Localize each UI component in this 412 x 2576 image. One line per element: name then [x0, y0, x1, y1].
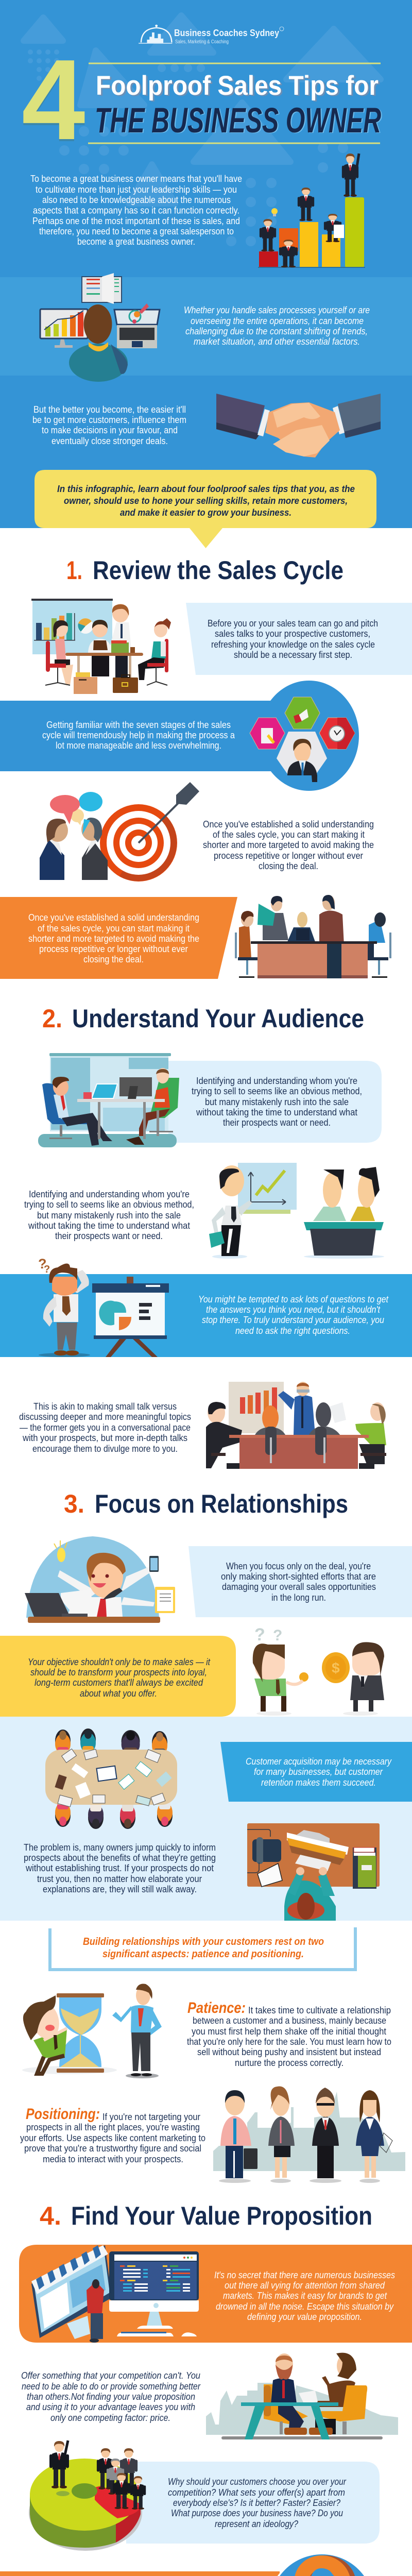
- illustration: office window with two people at desk: [38, 1053, 179, 1147]
- title: 4 Foolproof Sales Tips for the Business Owner: [22, 36, 381, 164]
- man with glasses: [312, 2088, 339, 2178]
- seated woman right: [368, 912, 391, 978]
- text: the better you become: eventually close stronger deals.: [52, 436, 168, 446]
- text: small talk: encourage them to divulge more to you.: [32, 1444, 178, 1454]
- panel: orange understanding: [0, 897, 237, 979]
- illustration: puzzled man with presentation board: [38, 1256, 169, 1357]
- seated woman left: [45, 620, 73, 685]
- intro text block: To become a great business owner means that you'll have: [30, 174, 242, 184]
- text: small talk: [19, 1401, 191, 1454]
- woman in grey jacket: [268, 2086, 295, 2178]
- man standing with folder: [258, 896, 288, 940]
- text: the better you become: But the better you become, the easier it'll: [33, 404, 186, 415]
- panel: seven stages band: lot more manageable and less overwhelming.: [56, 740, 221, 751]
- illustration: two men with coins: [253, 1625, 384, 1716]
- illustration: two men and target with arrow: [40, 782, 199, 882]
- text: tempted to ask: stop there. To truly understand your audience, you: [202, 1315, 384, 1325]
- illustration: person at monitor and laptop: [40, 273, 160, 382]
- panel: blue tempted band: [0, 1274, 412, 1357]
- heading: 4. Find Your Value Proposition: Find Your Value Proposition: [71, 2201, 372, 2230]
- heading: 1. Review the Sales Cycle: Review the Sales Cycle: [93, 556, 344, 585]
- panel: seven stages band: Getting familiar with the seven stages of the sales: [46, 720, 231, 730]
- attendee with orange hair: [252, 1405, 288, 1448]
- man in suit with big coin: [322, 1642, 384, 1711]
- heading: 3. Focus on Relationships: Focus on Relationships: [95, 1489, 348, 1518]
- panel: why should customers choose you: everybody else's? Is it better? Faster? Easier?: [173, 2498, 340, 2508]
- panel: seven stages band: [0, 681, 359, 791]
- text: identifying prospects: trying to sell to seems like an obvious method,: [24, 1199, 194, 1210]
- illustration: handshake: [216, 394, 381, 457]
- text: whether you handle sales: market situation, and other essential factors.: [194, 336, 360, 347]
- panel: orange numerous businesses: drowned in all the noise. Escape this situation by: [216, 2301, 394, 2312]
- panel: orange understanding: closing the deal.: [83, 954, 144, 964]
- left man: [40, 819, 68, 880]
- panel: orange numerous businesses: markets. This makes it easy for brands to get: [223, 2291, 387, 2301]
- panel: light blue retention section: [0, 1717, 412, 1921]
- text: the problem is: explanations are, they will still walk away.: [43, 1884, 197, 1894]
- text: the problem is: The problem is, many owners jump quickly to inform: [24, 1842, 216, 1853]
- standing man: [109, 604, 132, 678]
- text: patience: It takes time to cultivate a relationship: [248, 2005, 391, 2015]
- seated man with laptop: [287, 912, 315, 942]
- man in blue chair: [42, 1077, 112, 1146]
- panel: before you pitch: should be a necessary first step.: [234, 650, 352, 660]
- logo: Business Coaches Sydney: Sales, Marketing & Coaching: [175, 39, 229, 45]
- text: the better you become: to make decisions in your favour, and: [42, 425, 178, 435]
- panel: orange numerous businesses: defining your value proposition.: [247, 2312, 362, 2322]
- woman in navy suit: [356, 2090, 392, 2178]
- title: 4 Foolproof Sales Tips for the Business Owner: 4: [22, 36, 85, 164]
- text: positioning: media to interact with your prospects.: [43, 2154, 183, 2164]
- text: solid understanding: shorter and more targeted to avoid making the: [203, 840, 374, 850]
- intro text block: therefore, you need to become a great salesperson to: [39, 226, 234, 236]
- text: offer something: [21, 2370, 201, 2423]
- illustration: four professionals in front of skyline: [213, 2086, 405, 2183]
- illustration: boardroom presentation: [206, 1382, 386, 1469]
- callout: building relationships box: Building relationships with your customers rest on two: [83, 1936, 324, 1947]
- panel: identifying audience: trying to sell to seems like an obvious method,: [192, 1086, 362, 1096]
- panel: yellow objective: about what you offer.: [80, 1688, 157, 1699]
- text: offer something: than others.Not finding your value proposition: [27, 2392, 195, 2402]
- panel: before you pitch: sales talks to your prospective customers,: [215, 629, 370, 639]
- question marks: [254, 1625, 282, 1645]
- panel: orange numerous businesses: [19, 2245, 412, 2343]
- left man: [264, 2353, 308, 2435]
- audience pair: [304, 1167, 384, 1256]
- callout: building relationships box: significant aspects: patience and positioning.: [102, 1948, 304, 1960]
- text: tempted to ask: [198, 1294, 389, 1336]
- text: the better you become: be to get more customers, influence them: [32, 415, 186, 425]
- text: identifying prospects: but many mistakenly rush into the sale: [37, 1210, 181, 1221]
- intro text block: [30, 174, 242, 247]
- question marks: ?: [254, 1625, 265, 1645]
- presenter in blue: [278, 1382, 315, 1435]
- panel: why should customers choose you: represent an ideology?: [215, 2519, 298, 2529]
- text: solid understanding: Once you've established a solid understanding: [203, 819, 374, 829]
- panel: orange understanding: shorter and more targeted to avoid making the: [28, 934, 199, 944]
- panel: focus on the deal: [188, 1546, 412, 1617]
- panel: orange numerous businesses: out there all vying for attention from shared: [225, 2280, 385, 2291]
- illustration: man inside giant question mark: [268, 2553, 375, 2576]
- heading: 1. Review the Sales Cycle: 1.: [66, 556, 82, 585]
- text: positioning: prospects in all the right places, you're wasting: [26, 2122, 200, 2132]
- text: positioning: prove that you're a trustworthy figure and social: [24, 2143, 201, 2154]
- panel: why should customers choose you: What purpose does your business have? Do you: [171, 2508, 343, 2518]
- text: patience: Patience:: [187, 1999, 246, 2016]
- text: small talk: discussing deeper and more meaningful topics: [19, 1412, 191, 1422]
- seated woman right: [138, 618, 171, 685]
- panel: before you pitch: Before you or your sales team can go and pitch: [208, 618, 378, 629]
- text: solid understanding: process repetitive or longer without ever: [214, 851, 363, 861]
- panel: seven stages band: cycle will tremendously help in making the process a: [42, 730, 235, 740]
- title: 4 Foolproof Sales Tips for the Business Owner: Foolproof Sales Tips for: [96, 71, 379, 101]
- panel: orange unique points: [0, 2571, 285, 2576]
- seated man: [88, 620, 112, 676]
- text: the problem is: prospects about the benefits of what they're getting: [24, 1853, 216, 1863]
- illustration: team meeting at table: [31, 599, 171, 694]
- intro text block: also need to be knowledgeable about the numerous: [42, 195, 231, 205]
- panel: focus on the deal: in the long run.: [271, 1592, 326, 1603]
- text: whether you handle sales: [184, 305, 370, 347]
- text: patience: you must first help them shake off the initial thought: [192, 2026, 386, 2037]
- man in pink shirt: [220, 2090, 258, 2178]
- panel: orange understanding: of the sales cycle, you can start making it: [38, 923, 190, 934]
- standing man with glasses: [112, 1984, 162, 2078]
- right man: [81, 818, 108, 880]
- text: small talk: — the former gets you in a conversational pace: [20, 1422, 191, 1433]
- text: tempted to ask: the answers you think you need, but it shouldn't: [206, 1304, 381, 1315]
- illustration: hourglass with two men: [22, 1984, 162, 2078]
- heading: 4. Find Your Value Proposition: 4.: [40, 2201, 61, 2230]
- text: patience: that you're only here for the sale. You must learn how to: [187, 2037, 391, 2047]
- panel: customer acquisition: for many businesses, but customer: [254, 1767, 383, 1777]
- panel: identifying audience: their prospects want or need.: [223, 1117, 331, 1128]
- panel: customer acquisition: Customer acquisition may be necessary: [246, 1756, 392, 1767]
- attendee with grey hair: [306, 1402, 346, 1449]
- woman in green chair: [126, 1068, 179, 1145]
- text: the problem is: trust you, then no matter how elaborate your: [37, 1874, 202, 1884]
- background pattern: [24, 15, 381, 246]
- text: small talk: with your prospects, but more in-depth talks: [22, 1433, 187, 1443]
- text: offer something: Offer something that your competition can't. You: [21, 2370, 200, 2381]
- icon: hexagons with businessman: [250, 697, 355, 782]
- callout: yellow speech box: In this infographic, learn about four foolproof sales tips that you, as the: [57, 483, 355, 494]
- text: offer something: only one competing factor: price.: [50, 2413, 170, 2423]
- attendee left: [206, 1402, 242, 1468]
- illustration: team around a desk: [235, 895, 391, 978]
- panel: yellow objective: should be to transform your prospects into loyal,: [30, 1667, 207, 1677]
- heading: 2. Understand Your Audience: Understand Your Audience: [72, 1004, 364, 1033]
- man in suit with big coin: $: [332, 1660, 340, 1676]
- speech bubbles: [50, 792, 102, 835]
- panel: before you pitch: refreshing your knowledge on the sales cycle: [211, 639, 375, 650]
- illustration: desk seen from above: [247, 1823, 380, 1921]
- text: patience: between a customer and a business, mainly because: [193, 2015, 386, 2026]
- text: identifying prospects: [24, 1189, 194, 1241]
- text: patience: [187, 1999, 391, 2068]
- question marks: ?: [273, 1627, 282, 1644]
- text: solid understanding: [203, 819, 374, 871]
- panel: yellow objective: Your objective shouldn't only be to make sales — it: [28, 1657, 211, 1667]
- illustration: businessmen climbing bar chart: [258, 154, 365, 268]
- text: patience: nurture the process correctly.: [235, 2058, 344, 2068]
- callout: yellow speech box: owner, should use to hone your selling skills, retain more customers,: [64, 495, 348, 506]
- panel: yellow objective: long-term customers that'll always be excited: [35, 1677, 203, 1688]
- right man: [299, 2353, 367, 2435]
- text: the problem is: [24, 1842, 216, 1894]
- text: offer something: need to be able to do or provide something better: [22, 2381, 201, 2392]
- panel: blue hero background: [0, 0, 412, 528]
- text: positioning: Positioning:: [26, 2106, 100, 2123]
- text: positioning: [20, 2106, 205, 2164]
- illustration: presenter and audience at podium: [209, 1163, 384, 1259]
- papers and laptops on the table: [55, 1749, 172, 1807]
- callout: yellow speech box: and make it easier to grow your business.: [120, 507, 291, 518]
- panel: identifying audience: but many mistakenly rush into the sale: [205, 1097, 349, 1107]
- panel: identifying audience: without taking the time to understand what: [196, 1107, 357, 1117]
- panel: yellow objective: [0, 1636, 236, 1717]
- panel: why should customers choose you: Why should your customers choose you over your: [168, 2477, 347, 2487]
- panel: focus on the deal: When you focus only on the deal, you're: [226, 1561, 371, 1571]
- attendee in green: [355, 1402, 386, 1464]
- briefcase: [113, 675, 138, 693]
- text: solid understanding: closing the deal.: [259, 861, 318, 871]
- panel: customer acquisition: [220, 1742, 412, 1802]
- illustration: pie chart with businessmen: [29, 2441, 146, 2551]
- intro text block: become a great business owner.: [77, 236, 195, 247]
- panel: orange understanding: process repetitive or longer without ever: [39, 944, 188, 954]
- intro text block: Perhaps one of the most important of these is sales, and: [32, 216, 240, 226]
- text: the problem is: without establishing trust. If your prospects do not: [25, 1863, 214, 1873]
- panel: identifying audience: Identifying and understanding whom you're: [196, 1076, 357, 1086]
- panel: handling sales band: [0, 277, 412, 376]
- callout: building relationships box: [50, 1927, 355, 1970]
- text: positioning: If you're not targeting your: [102, 2112, 200, 2122]
- callout: yellow speech box: [35, 470, 376, 548]
- text: solid understanding: of the sales cycle, you can start making it: [213, 829, 365, 840]
- intro text block: to cultivate more than just your leadership skills — you: [36, 184, 237, 195]
- illustration: online store monitors: [31, 2245, 199, 2343]
- text: tempted to ask: need to ask the right questions.: [235, 1326, 350, 1336]
- panel: why should customers choose you: competition? What sets your offer(s) apart from: [168, 2487, 345, 2498]
- illustration: puzzled man with presentation board: ?: [38, 1256, 46, 1272]
- logo: Business Coaches Sydney: Business Coaches Sydney: [174, 28, 279, 38]
- seated man left: [235, 911, 259, 978]
- standing man: [319, 895, 344, 945]
- text: identifying prospects: Identifying and understanding whom you're: [29, 1189, 190, 1199]
- illustration: two men negotiating at table: [206, 2353, 398, 2439]
- panel: customer acquisition: retention makes them succeed.: [261, 1777, 376, 1788]
- heading: 3. Focus on Relationships: 3.: [64, 1489, 84, 1518]
- panel: focus on the deal: only making short-sighted efforts that are: [221, 1571, 376, 1582]
- presenter: [209, 1165, 252, 1256]
- illustration: puzzled man with presentation board: ?: [44, 1264, 50, 1275]
- logo: Business Coaches Sydney: [139, 25, 284, 45]
- panel: orange understanding: Once you've established a solid understanding: [28, 912, 199, 923]
- text: small talk: This is akin to making small talk versus: [33, 1401, 177, 1412]
- text: offer something: and using it to your advantage leaves you with: [26, 2402, 195, 2412]
- text: positioning: your efforts. Use aspects like content marketing to: [20, 2133, 205, 2143]
- text: identifying prospects: without taking the time to understand what: [28, 1221, 190, 1231]
- text: identifying prospects: their prospects want or need.: [55, 1231, 163, 1241]
- panel: focus on the deal: damaging your overall sales opportunities: [222, 1582, 376, 1592]
- text: the better you become: [32, 404, 186, 446]
- heading: 2. Understand Your Audience: 2.: [42, 1004, 62, 1033]
- illustration: multitasking man at desk: [25, 1536, 175, 1623]
- panel: why should customers choose you: [126, 2462, 380, 2544]
- panel: orange numerous businesses: It's no secret that there are numerous businesses: [214, 2270, 395, 2280]
- text: whether you handle sales: challenging due to the constant shifting of trends,: [185, 326, 368, 336]
- text: whether you handle sales: overseeing the entire operations, it can become: [191, 316, 364, 326]
- panel: before you pitch: [186, 603, 412, 675]
- text: tempted to ask: You might be tempted to ask lots of questions to get: [198, 1294, 389, 1304]
- intro text block: aspects that a company has so it can function correctly.: [33, 205, 239, 215]
- text: whether you handle sales: Whether you handle sales processes yourself or are: [184, 305, 370, 315]
- panel: identifying audience: [168, 1061, 382, 1143]
- man in green shirt: [253, 1643, 308, 1711]
- illustration: top-down team at table: [45, 1728, 177, 1829]
- cardboard box: [74, 672, 97, 694]
- green shirt man: [23, 1995, 67, 2074]
- text: patience: sell without being pushy and insistent but instead: [197, 2047, 381, 2057]
